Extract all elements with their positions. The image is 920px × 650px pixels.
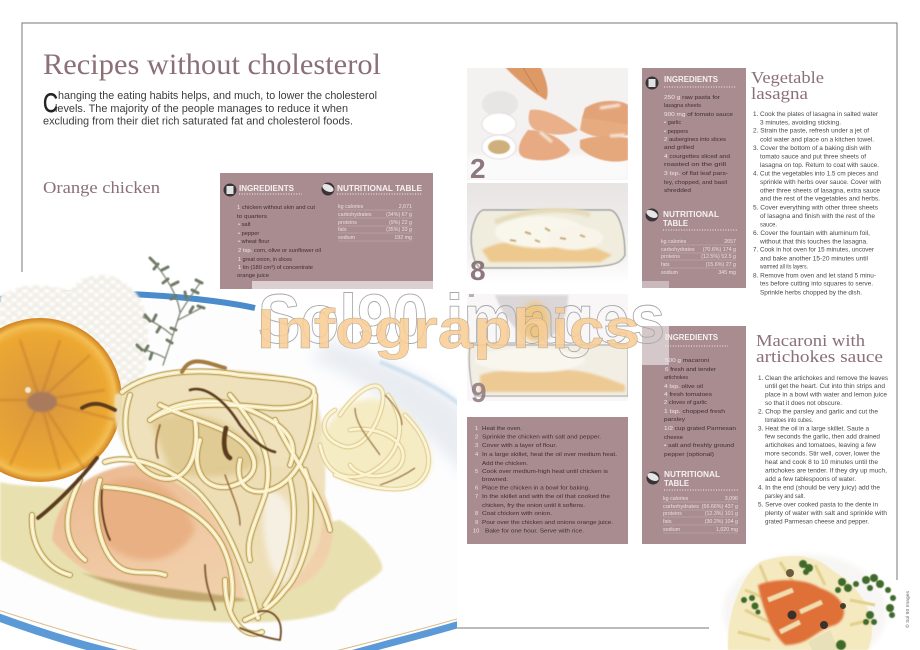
recipe: macaroni with artichokes sauce bbox=[756, 331, 888, 526]
nutrition table: (35%) 33 g bbox=[386, 227, 412, 233]
ingredients list: 4 courgettes sliced and bbox=[664, 154, 730, 160]
steps: sauce. bbox=[760, 222, 777, 228]
ingredients list bbox=[237, 205, 321, 279]
ingredients list: 2 aubergines into slices bbox=[664, 137, 726, 143]
ingredients list: pepper (optional) bbox=[664, 452, 714, 458]
photo: step 2 chicken and flour bbox=[467, 66, 628, 180]
panel: orange chicken ingredients and nutrition bbox=[220, 173, 433, 289]
steps: 5. Serve over cooked pasta to the dente in bbox=[758, 503, 878, 509]
ingredients list: lasagna sheets bbox=[664, 103, 701, 109]
nutrition table: proteins bbox=[661, 254, 680, 260]
panel: orange chicken steps: Place the chicken in a bowl for baking. bbox=[482, 485, 590, 491]
watermark: Infographics bbox=[257, 297, 640, 360]
steps: plenty of water with salt and sprinkle with bbox=[765, 511, 887, 517]
nutrition table: fats bbox=[338, 227, 347, 233]
step number 8: 8 bbox=[470, 255, 486, 286]
panel: orange chicken steps: Sprinkle the chicken with salt and pepper. bbox=[482, 434, 601, 440]
orange slice bbox=[0, 318, 122, 482]
steps: without that this touches the lasagna. bbox=[759, 239, 868, 245]
steps: warmed all its layers. bbox=[759, 265, 808, 271]
chicken bbox=[52, 464, 333, 600]
nutrition table: fats bbox=[661, 262, 670, 268]
steps: 6. Cover the fountain with aluminum foil, bbox=[753, 231, 870, 237]
ingredients list: 500 g macaroni bbox=[665, 358, 709, 364]
heading: macaroni with artichokes sauce: Macaroni with bbox=[756, 331, 866, 350]
nutrition table: 1,020 mg bbox=[716, 527, 738, 533]
heading: vegetable lasagna bbox=[751, 68, 824, 103]
panel: orange chicken steps: 7 bbox=[475, 494, 478, 500]
nutrition table: proteins bbox=[338, 220, 357, 226]
step number 9: 9 bbox=[471, 377, 487, 408]
watermark: Sol90 images bbox=[258, 280, 665, 358]
panel: vegetable lasagna ingredients and nutrition bbox=[642, 68, 746, 288]
heading: nutritional table bbox=[664, 470, 720, 488]
steps: 4. Cut the vegetables into 1.5 cm pieces and bbox=[753, 171, 878, 177]
ingredients list: • pepper bbox=[238, 231, 259, 237]
ingredients list: 2 cloves of garlic bbox=[664, 400, 707, 406]
nutrition table: proteins bbox=[663, 511, 682, 517]
recipe: vegetable lasagna bbox=[751, 68, 881, 296]
heading: vegetable lasagna: lasagna bbox=[751, 84, 808, 103]
nutrition table: kg calories bbox=[663, 496, 689, 502]
ingredients list: and grilled bbox=[664, 145, 694, 151]
steps: artichokes are tender. If they dry up much, bbox=[765, 469, 887, 475]
title: Recipes without cholesterol bbox=[43, 48, 381, 81]
nutrition table bbox=[338, 204, 412, 241]
ingredients list: 3 tsp. of flat leaf pars- bbox=[664, 171, 728, 177]
onion topping bbox=[114, 370, 325, 600]
steps: 2. Strain the paste, refresh under a jet of bbox=[753, 129, 869, 135]
nutrition table: 2,671 bbox=[399, 204, 412, 210]
nutrition table: carbohydrates bbox=[661, 247, 695, 253]
panel: orange chicken steps: 4 bbox=[475, 452, 478, 458]
icon: ingredients book bbox=[224, 184, 236, 196]
ingredients list: 250 g raw pasta for bbox=[664, 95, 720, 101]
steps: 8. Remove from oven and let stand 5 minu- bbox=[753, 273, 876, 279]
nutrition table: carbohydrates bbox=[663, 504, 699, 510]
nutrition table: 192 mg bbox=[394, 235, 412, 241]
heading: vegetable lasagna: Vegetable bbox=[751, 68, 824, 87]
panel: orange chicken steps: 2 bbox=[475, 434, 478, 440]
sauce bbox=[0, 482, 382, 623]
side onion bbox=[320, 399, 431, 488]
panel: orange chicken steps: 6 bbox=[475, 485, 478, 491]
steps: heat and cook 8 to 10 minutes until the bbox=[765, 460, 879, 466]
heading: nutritional table: NUTRITIONAL bbox=[664, 470, 720, 479]
heading: macaroni with artichokes sauce bbox=[756, 331, 883, 366]
steps: until get the heart. Cut into thin strips and bbox=[765, 384, 885, 390]
panel: orange chicken steps: 8 bbox=[475, 511, 478, 517]
ingredients list: shredded bbox=[664, 188, 691, 194]
steps: few seconds the garlic, then add drained bbox=[765, 435, 880, 441]
steps bbox=[753, 112, 881, 296]
nutrition table: (34%) 67 g bbox=[386, 212, 412, 218]
nutrition table: 3,096 bbox=[725, 496, 738, 502]
ingredients list: cheese bbox=[664, 435, 683, 441]
nutrition table: (70.6%) 174 g bbox=[703, 247, 736, 253]
steps: 2. Chop the parsley and garlic and cut the bbox=[758, 409, 879, 415]
panel: orange chicken steps: Add the chicken. bbox=[482, 461, 528, 467]
intro text: hanging the eating habits helps, and much, to lower the cholesterol bbox=[58, 90, 377, 102]
steps: so that it does not obscure. bbox=[765, 401, 842, 407]
panel: orange chicken steps: Bake for one hour. Serve with rice. bbox=[485, 528, 584, 534]
nutrition table: (9%) 22 g bbox=[389, 220, 412, 226]
icon: nutrition plate bbox=[646, 471, 660, 484]
ingredients list: artichokes bbox=[664, 375, 688, 381]
steps: tomatoes into cubes. bbox=[765, 418, 813, 424]
ingredients list: 4 tsp. olive oil bbox=[664, 384, 703, 390]
steps: add a few tablespoons of water. bbox=[765, 477, 856, 483]
nutrition table: fats bbox=[663, 519, 672, 525]
steps: 4. In the end (should be very juicy) add the bbox=[758, 486, 881, 492]
heading: macaroni with artichokes sauce: artichokes sauce bbox=[756, 347, 883, 366]
steps: tes before cutting into squares to serve. bbox=[760, 282, 873, 288]
intro text: levels. The majority of the people manages to reduce it when bbox=[55, 103, 348, 115]
steps: artichokes and tomatoes, leaving a few bbox=[765, 443, 877, 449]
ingredients list bbox=[664, 358, 736, 458]
steps: parsley and salt. bbox=[765, 494, 805, 500]
nutrition table: 345 mg bbox=[718, 270, 736, 276]
steps: sprinkle with herbs over sauce. Cover with bbox=[760, 180, 881, 186]
ingredients list: • wheat flour bbox=[238, 239, 270, 245]
steps: place in a bowl with water and lemon juice bbox=[765, 392, 888, 398]
panel: orange chicken steps: browned. bbox=[482, 477, 508, 483]
ingredients list: • peppers bbox=[664, 129, 688, 135]
steps: more seconds. Stir well, cover, lower the bbox=[765, 452, 881, 458]
ingredients list: 1 chicken without skin and cut bbox=[237, 205, 315, 211]
ingredients list: roasted on the grill bbox=[664, 162, 726, 168]
nutrition table: sodium bbox=[661, 270, 679, 276]
step number 2: 2 bbox=[470, 153, 486, 184]
steps: 1. Clean the artichokes and remove the leaves bbox=[758, 376, 888, 382]
nutrition table bbox=[661, 239, 736, 276]
heading: ingredients: INGREDIENTS bbox=[664, 75, 719, 84]
intro text bbox=[43, 88, 377, 128]
icon: nutrition plate bbox=[645, 208, 659, 222]
steps: and the rest of the vegetables and herbs. bbox=[760, 197, 880, 203]
ingredients list: • garlic bbox=[664, 120, 681, 126]
ingredients list: 1 great onion, in slices bbox=[238, 257, 292, 263]
panel: orange chicken steps: In a large skillet, heat the oil over medium heat. bbox=[482, 452, 617, 458]
ingredients list: 6 fresh and tender bbox=[665, 367, 716, 373]
heading: nutritional table: NUTRITIONAL bbox=[663, 210, 719, 219]
ingredients list: • salt and freshly ground bbox=[664, 443, 734, 449]
panel: orange chicken steps bbox=[467, 417, 628, 544]
nutrition table: (12.3%) 101 g bbox=[705, 511, 738, 517]
steps: lasagna on top. Return to coat with sauce. bbox=[760, 163, 879, 169]
ingredients list: 1/2 cup grated Parmesan bbox=[664, 426, 736, 432]
intro text: excluding from their diet rich saturated fat and cholesterol foods. bbox=[43, 116, 353, 128]
ingredients list: orange juice bbox=[237, 273, 269, 279]
steps: 3 minutes, avoiding sticking. bbox=[760, 120, 841, 126]
nutrition table bbox=[663, 496, 738, 533]
panel: orange chicken steps: 9 bbox=[475, 520, 478, 526]
steps: tomato sauce and put three sheets of bbox=[760, 154, 866, 160]
nutrition table: sodium bbox=[338, 235, 356, 241]
photo: pasta with artichokes bbox=[723, 554, 896, 650]
thyme sprig bbox=[137, 258, 204, 365]
rice bbox=[0, 275, 148, 388]
photo: orange chicken plate bbox=[0, 258, 475, 650]
heading: nutritional table bbox=[663, 210, 719, 228]
steps: 7. Cook in hot oven for 15 minutes, uncover bbox=[753, 248, 874, 254]
heading: nutritional table: TABLE bbox=[663, 219, 689, 228]
intro text: C bbox=[43, 88, 58, 118]
panel: orange chicken steps: Heat the oven. bbox=[482, 426, 522, 432]
nutrition table: kg calories bbox=[661, 239, 687, 245]
ingredients list: ley, chopped, and basil bbox=[664, 180, 727, 186]
nutrition table: sodium bbox=[663, 527, 681, 533]
photo: step 9 baking dish with orange juice bbox=[467, 292, 628, 401]
heading: nutritional table: NUTRITIONAL TABLE bbox=[337, 184, 423, 193]
heading: ingredients: INGREDIENTS bbox=[239, 184, 295, 193]
nutrition table: carbohydrates bbox=[338, 212, 372, 218]
steps: 3. Heat the oil in a large skillet. Saute a bbox=[758, 426, 870, 432]
photo: step 8 baking dish bbox=[467, 183, 628, 270]
panel: orange chicken steps: chicken, fry the onion until it softens. bbox=[482, 503, 585, 509]
ingredients list bbox=[664, 95, 733, 194]
icon: ingredients book bbox=[646, 76, 658, 90]
nutrition table: (15.6%) 27 g bbox=[706, 262, 736, 268]
panel: orange chicken steps: In the skillet and with the oil that cooked the bbox=[482, 494, 610, 500]
heading: ingredients: INGREDIENTS bbox=[665, 333, 719, 342]
panel: macaroni ingredients and nutrition bbox=[642, 326, 746, 544]
panel: orange chicken steps: 1 bbox=[475, 426, 478, 432]
steps: grated Parmesan cheese and pepper. bbox=[765, 520, 869, 526]
nutrition table: kg calories bbox=[338, 204, 364, 210]
heading: orange chicken: Orange chicken bbox=[43, 178, 161, 197]
panel: orange chicken steps: Cover with a layer of flour. bbox=[482, 443, 557, 449]
steps: 5. Cover everything with other three sheets bbox=[753, 205, 878, 211]
panel: orange chicken steps: 10 bbox=[473, 528, 479, 534]
nutrition table: (56.66%) 437 g bbox=[702, 504, 738, 510]
steps: and bake another 15-20 minutes until bbox=[760, 256, 868, 262]
steps: of lasagna and finish with the rest of the bbox=[760, 214, 876, 220]
panel: orange chicken steps: Coat chicken with onion. bbox=[482, 511, 552, 517]
nutrition table: 2657 bbox=[724, 239, 736, 245]
steps bbox=[758, 376, 888, 526]
ingredients list: to quarters bbox=[237, 214, 267, 220]
panel: orange chicken steps: Cook over medium-high heat until chicken is bbox=[482, 469, 608, 475]
panel: orange chicken steps: 5 bbox=[475, 469, 478, 475]
ingredients list: • salt bbox=[238, 222, 251, 228]
heading: nutritional table: TABLE bbox=[664, 479, 690, 488]
steps: 1. Cook the plates of lasagna in salted water bbox=[753, 112, 878, 118]
steps: cold water and place on a kitchen towel. bbox=[760, 137, 874, 143]
steps: other three sheets of lasagna, extra sauce bbox=[760, 188, 881, 194]
panel: orange chicken steps: Pour over the chicken and onions orange juice. bbox=[482, 520, 613, 526]
icon: nutrition plate bbox=[321, 182, 335, 196]
ingredients list: parsley bbox=[664, 417, 685, 423]
burnt onion edges bbox=[38, 361, 281, 640]
ingredients list: 2 tsp. corn, olive or sunflower oil bbox=[238, 248, 321, 254]
ingredients list: 1 tin (180 cm³) of concentrate bbox=[238, 265, 313, 271]
steps: 3. Cover the bottom of a baking dish with bbox=[753, 146, 871, 152]
panel: orange chicken steps: 3 bbox=[475, 443, 478, 449]
nutrition table: (12.5%) 52.5 g bbox=[701, 254, 736, 260]
ingredients list: 900 mg of tomato sauce bbox=[664, 112, 733, 118]
ingredients list: 1 tsp. chopped fresh bbox=[664, 409, 725, 415]
nutrition table: (30.2%) 104 g bbox=[705, 519, 738, 525]
steps: Sprinkle herbs chopped by the dish. bbox=[760, 290, 862, 296]
credit: © Sol 90 Images bbox=[904, 590, 911, 628]
ingredients list: 4 fresh tomatoes bbox=[664, 392, 712, 398]
